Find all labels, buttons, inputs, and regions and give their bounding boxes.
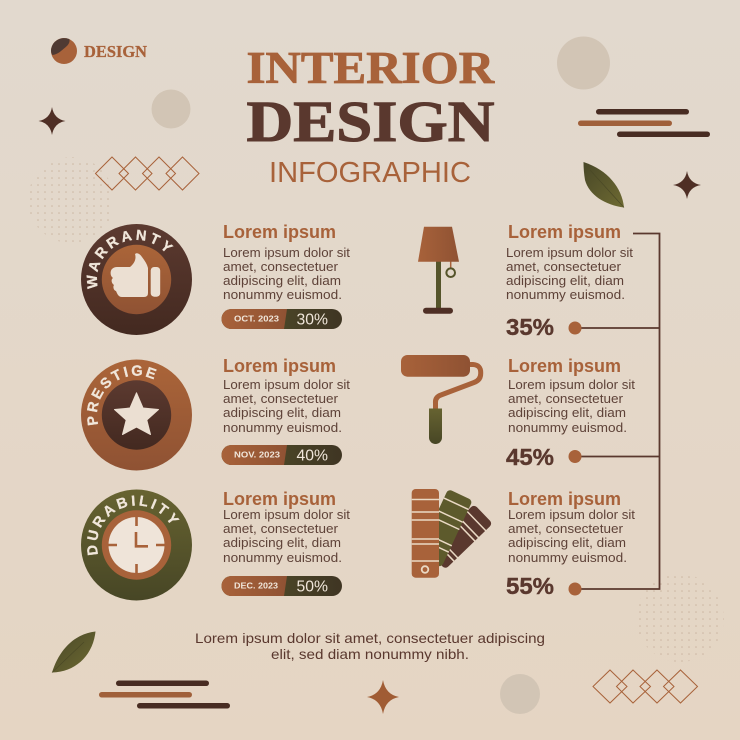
text block: durability: Lorem ipsum dolor sit <box>223 507 350 522</box>
text block: lamp: Lorem ipsum <box>508 222 621 242</box>
title line: interior: INTERIOR <box>246 44 495 94</box>
text block: lamp <box>506 222 633 302</box>
text block: swatches: Lorem ipsum <box>508 489 621 509</box>
pill: dec 2023 50%: DEC. 2023 <box>234 580 278 590</box>
text block: durability: amet, consectetuer <box>223 521 339 536</box>
dot: 35% <box>568 322 582 334</box>
decorative circle top right <box>557 36 610 90</box>
icon: paint roller <box>401 355 481 444</box>
stat: 55%: 55% <box>506 573 554 599</box>
stat: 45%: 45% <box>506 444 554 470</box>
text block: swatches <box>508 489 635 565</box>
icon: lamp <box>418 227 459 314</box>
icon: thumbs up <box>111 253 160 297</box>
text block: roller: adipiscing elit, diam <box>508 405 626 420</box>
text block: durability: nonummy euismod. <box>223 550 342 565</box>
text block: prestige: Lorem ipsum <box>223 356 336 376</box>
leaf bottom left <box>52 632 96 672</box>
badge: warranty <box>81 224 192 335</box>
title <box>246 44 495 189</box>
text block: swatches: Lorem ipsum dolor sit <box>508 507 635 522</box>
text block: warranty: nonummy euismod. <box>223 287 342 302</box>
logo <box>51 38 148 64</box>
badge label: WARRANTY <box>86 230 174 290</box>
text block: swatches: adipiscing elit, diam <box>508 535 626 550</box>
pill: dec 2023 50% <box>222 576 342 596</box>
diamonds top left <box>96 157 199 190</box>
decorative dot cluster bottom right <box>636 574 724 662</box>
sparkle bottom <box>367 680 399 714</box>
footer text: Lorem ipsum dolor sit amet, consectetuer adipiscing <box>195 630 545 646</box>
text block: roller: amet, consectetuer <box>508 391 624 406</box>
stripes top right <box>578 109 710 137</box>
dot: 45% <box>568 450 582 463</box>
text block: swatches: nonummy euismod. <box>508 550 627 565</box>
subtitle: INFOGRAPHIC <box>269 157 471 189</box>
text block: roller <box>508 356 635 435</box>
text block: prestige: nonummy euismod. <box>223 420 342 435</box>
text block: warranty <box>223 222 350 302</box>
text block: prestige <box>223 356 350 435</box>
logo wordmark: DESIGN <box>84 42 148 61</box>
title line: design: DESIGN <box>246 90 494 154</box>
decorative circle top left <box>152 90 190 128</box>
badge: prestige <box>81 360 192 470</box>
text block: prestige: adipiscing elit, diam <box>223 405 341 420</box>
text block: roller: nonummy euismod. <box>508 420 627 435</box>
connector lines <box>568 234 660 596</box>
text block: durability: adipiscing elit, diam <box>223 535 341 550</box>
decorative circle bottom <box>500 674 540 714</box>
icon: clock <box>102 510 171 580</box>
stat: 35%: 35% <box>506 314 554 340</box>
decorative dot cluster top left <box>28 157 114 243</box>
pill: oct 2023 30%: 30% <box>296 312 328 328</box>
pill: nov 2023 40% <box>222 445 342 465</box>
text block: lamp: Lorem ipsum dolor sit <box>506 245 633 260</box>
text block: durability: Lorem ipsum <box>223 489 336 509</box>
icon: star <box>114 393 158 434</box>
text block: warranty: adipiscing elit, diam <box>223 273 341 288</box>
stripes bottom left <box>99 680 230 708</box>
text block: roller: Lorem ipsum <box>508 356 621 376</box>
badge label: PRESTIGE <box>87 365 157 426</box>
footer text: elit, sed diam nonummy nibh. <box>271 646 469 662</box>
text block: warranty: Lorem ipsum dolor sit <box>223 245 350 260</box>
text block: durability <box>223 489 350 565</box>
text block: roller: Lorem ipsum dolor sit <box>508 377 635 392</box>
diamonds bottom right <box>593 670 698 703</box>
icon: colour swatch fan <box>412 489 493 578</box>
badge label: DURABILITY <box>87 495 180 556</box>
badge: durability <box>81 490 192 600</box>
footer text <box>195 630 545 662</box>
text block: warranty: amet, consectetuer <box>223 259 339 274</box>
text block: lamp: nonummy euismod. <box>506 287 625 302</box>
text block: warranty: Lorem ipsum <box>223 222 336 242</box>
pill: dec 2023 50%: 50% <box>296 578 328 596</box>
text block: prestige: amet, consectetuer <box>223 391 339 406</box>
pill: nov 2023 40%: NOV. 2023 <box>234 450 280 460</box>
text block: swatches: amet, consectetuer <box>508 521 624 536</box>
sparkle left <box>38 107 66 135</box>
pill: oct 2023 30% <box>222 309 342 329</box>
text block: lamp: adipiscing elit, diam <box>506 273 624 288</box>
pill: oct 2023 30%: OCT. 2023 <box>234 314 279 324</box>
text block: lamp: amet, consectetuer <box>506 259 622 274</box>
dot: 55% <box>568 582 582 596</box>
pill: nov 2023 40%: 40% <box>296 448 328 464</box>
sparkle right <box>673 171 701 199</box>
logo icon <box>51 38 77 64</box>
text block: prestige: Lorem ipsum dolor sit <box>223 377 350 392</box>
leaf top right <box>584 162 624 208</box>
